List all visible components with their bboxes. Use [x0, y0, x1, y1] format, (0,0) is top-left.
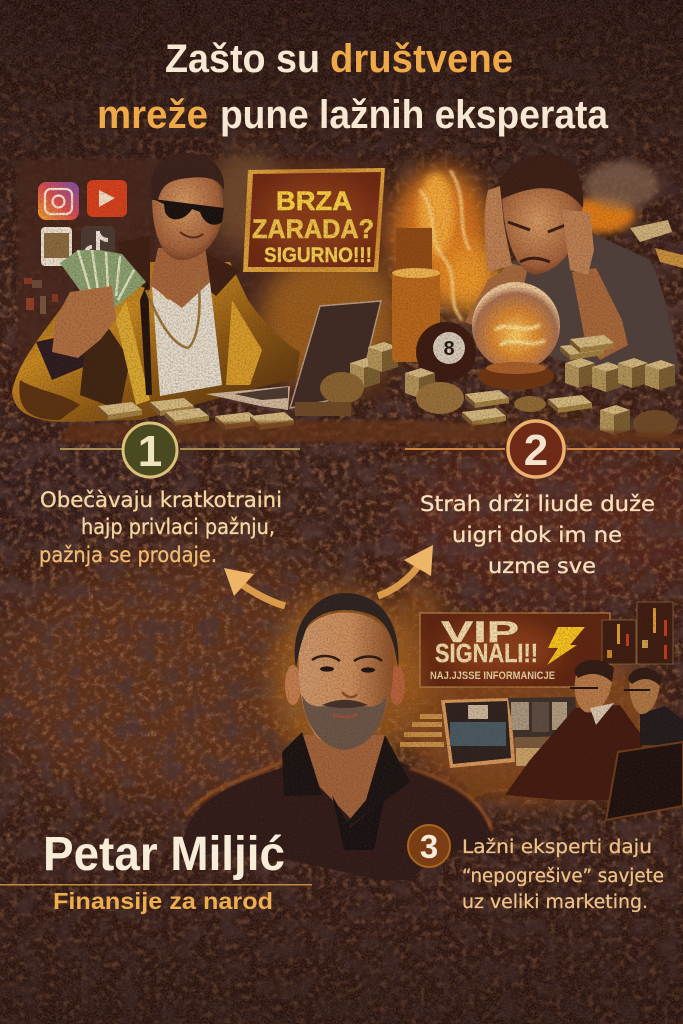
flames: [390, 161, 660, 320]
name: Petar Miljić: Petar Miljić: [43, 828, 285, 881]
badge 3: 3: [420, 828, 438, 865]
desk surface band: [60, 420, 683, 442]
icon: lightning bolt: [547, 627, 585, 665]
furrowed eyes: [508, 222, 568, 262]
title: mreže: [97, 93, 208, 137]
text block 3: uz veliki marketing.: [462, 892, 648, 913]
sunglasses: [153, 199, 224, 225]
portrait: Petar Miljić: [180, 590, 496, 880]
neck: [150, 246, 210, 308]
badge 3: [408, 825, 450, 867]
glowing cylinder: [392, 228, 440, 362]
hair: [497, 155, 583, 208]
VIP sign panel: VIP: [441, 616, 519, 649]
arrow: to point 1: [224, 568, 285, 606]
money fan: [60, 250, 146, 310]
text block 2: Strah drži liude duže: [420, 492, 655, 516]
neck: [303, 735, 392, 822]
sign: brza zarada: BRZA: [276, 186, 352, 216]
title: [97, 37, 609, 137]
title: društvene: [330, 37, 513, 81]
sign: brza zarada: ZARADA?: [252, 214, 374, 244]
nose: [342, 692, 357, 697]
hands on head: [485, 186, 512, 272]
arrow: to point 2: [378, 545, 433, 596]
ears: [285, 665, 301, 705]
social media icons: [38, 180, 127, 266]
shoulder rim light: [186, 762, 492, 830]
shirt: [180, 760, 496, 880]
sign: brza zarada: [243, 168, 385, 272]
badge 1: [60, 423, 300, 477]
text block 1: Obečàvaju kratkotraini: [40, 488, 282, 512]
hair: [295, 593, 398, 668]
shirt: [480, 232, 680, 376]
money piles: [405, 335, 677, 438]
title: pune lažnih eksperata: [220, 93, 609, 137]
forearms: [465, 262, 528, 330]
monitors: [441, 697, 578, 768]
stair of bills: [400, 714, 444, 747]
expert in dark suit: [624, 668, 683, 745]
scene: frightened investor with crystal ball: [390, 155, 683, 438]
eight ball: 8: [443, 338, 455, 360]
chair: [606, 742, 683, 820]
jacket: [12, 262, 300, 422]
small app tiles: [24, 278, 58, 314]
name underline: [0, 884, 312, 886]
collar: [282, 732, 410, 825]
crystal ball: [472, 282, 560, 390]
flying bill: [630, 220, 672, 242]
head: [299, 612, 393, 745]
eight ball: [416, 322, 476, 382]
hand: [52, 286, 116, 358]
badge 1: 1: [138, 427, 162, 476]
scene: fake influencer with money: [12, 150, 400, 430]
text block 3: “nepogrešive” savjete: [462, 866, 664, 887]
white shirt: [152, 282, 222, 396]
VIP sign panel: NAJ.JJSSE INFORMANICJE: [430, 670, 555, 682]
man in grey shirt: [465, 155, 683, 376]
laptop: [206, 301, 381, 410]
text block 2: [420, 492, 655, 578]
hair: [151, 153, 224, 200]
text block 1: pažnja se prodaje.: [39, 543, 217, 567]
eyes and brows: [312, 656, 382, 661]
text block 3: Lažni eksperti daju: [462, 837, 652, 858]
money stacks on desk: [98, 342, 398, 430]
tagline: Finansije za narod: [53, 888, 273, 914]
text block 3: [462, 837, 664, 913]
VIP sign panel: [420, 613, 610, 687]
text block 1: [39, 488, 282, 567]
badge 2: 2: [524, 426, 548, 475]
badge 2: [405, 421, 680, 477]
glow around head: [270, 590, 420, 770]
chart panels: [602, 602, 673, 664]
desk money and desk: [460, 748, 572, 800]
scene: VIP signals experts: [390, 580, 683, 820]
text block 2: uzme sve: [488, 554, 596, 578]
man in gold jacket: [12, 153, 300, 422]
beard: [302, 695, 386, 750]
VIP sign panel: SIGNALI!!: [435, 638, 538, 668]
head: [502, 186, 582, 275]
text block 2: uigri dok im ne: [452, 523, 622, 547]
text block 1: hajp privlaci pažnju,: [81, 515, 275, 539]
sign: brza zarada: SIGURNO!!!: [264, 244, 372, 267]
necklace: [146, 276, 200, 348]
expert in brown suit: [505, 660, 645, 800]
wall panel behind influencer: [18, 160, 388, 400]
title: Zašto su: [165, 37, 320, 81]
head: [152, 167, 223, 260]
